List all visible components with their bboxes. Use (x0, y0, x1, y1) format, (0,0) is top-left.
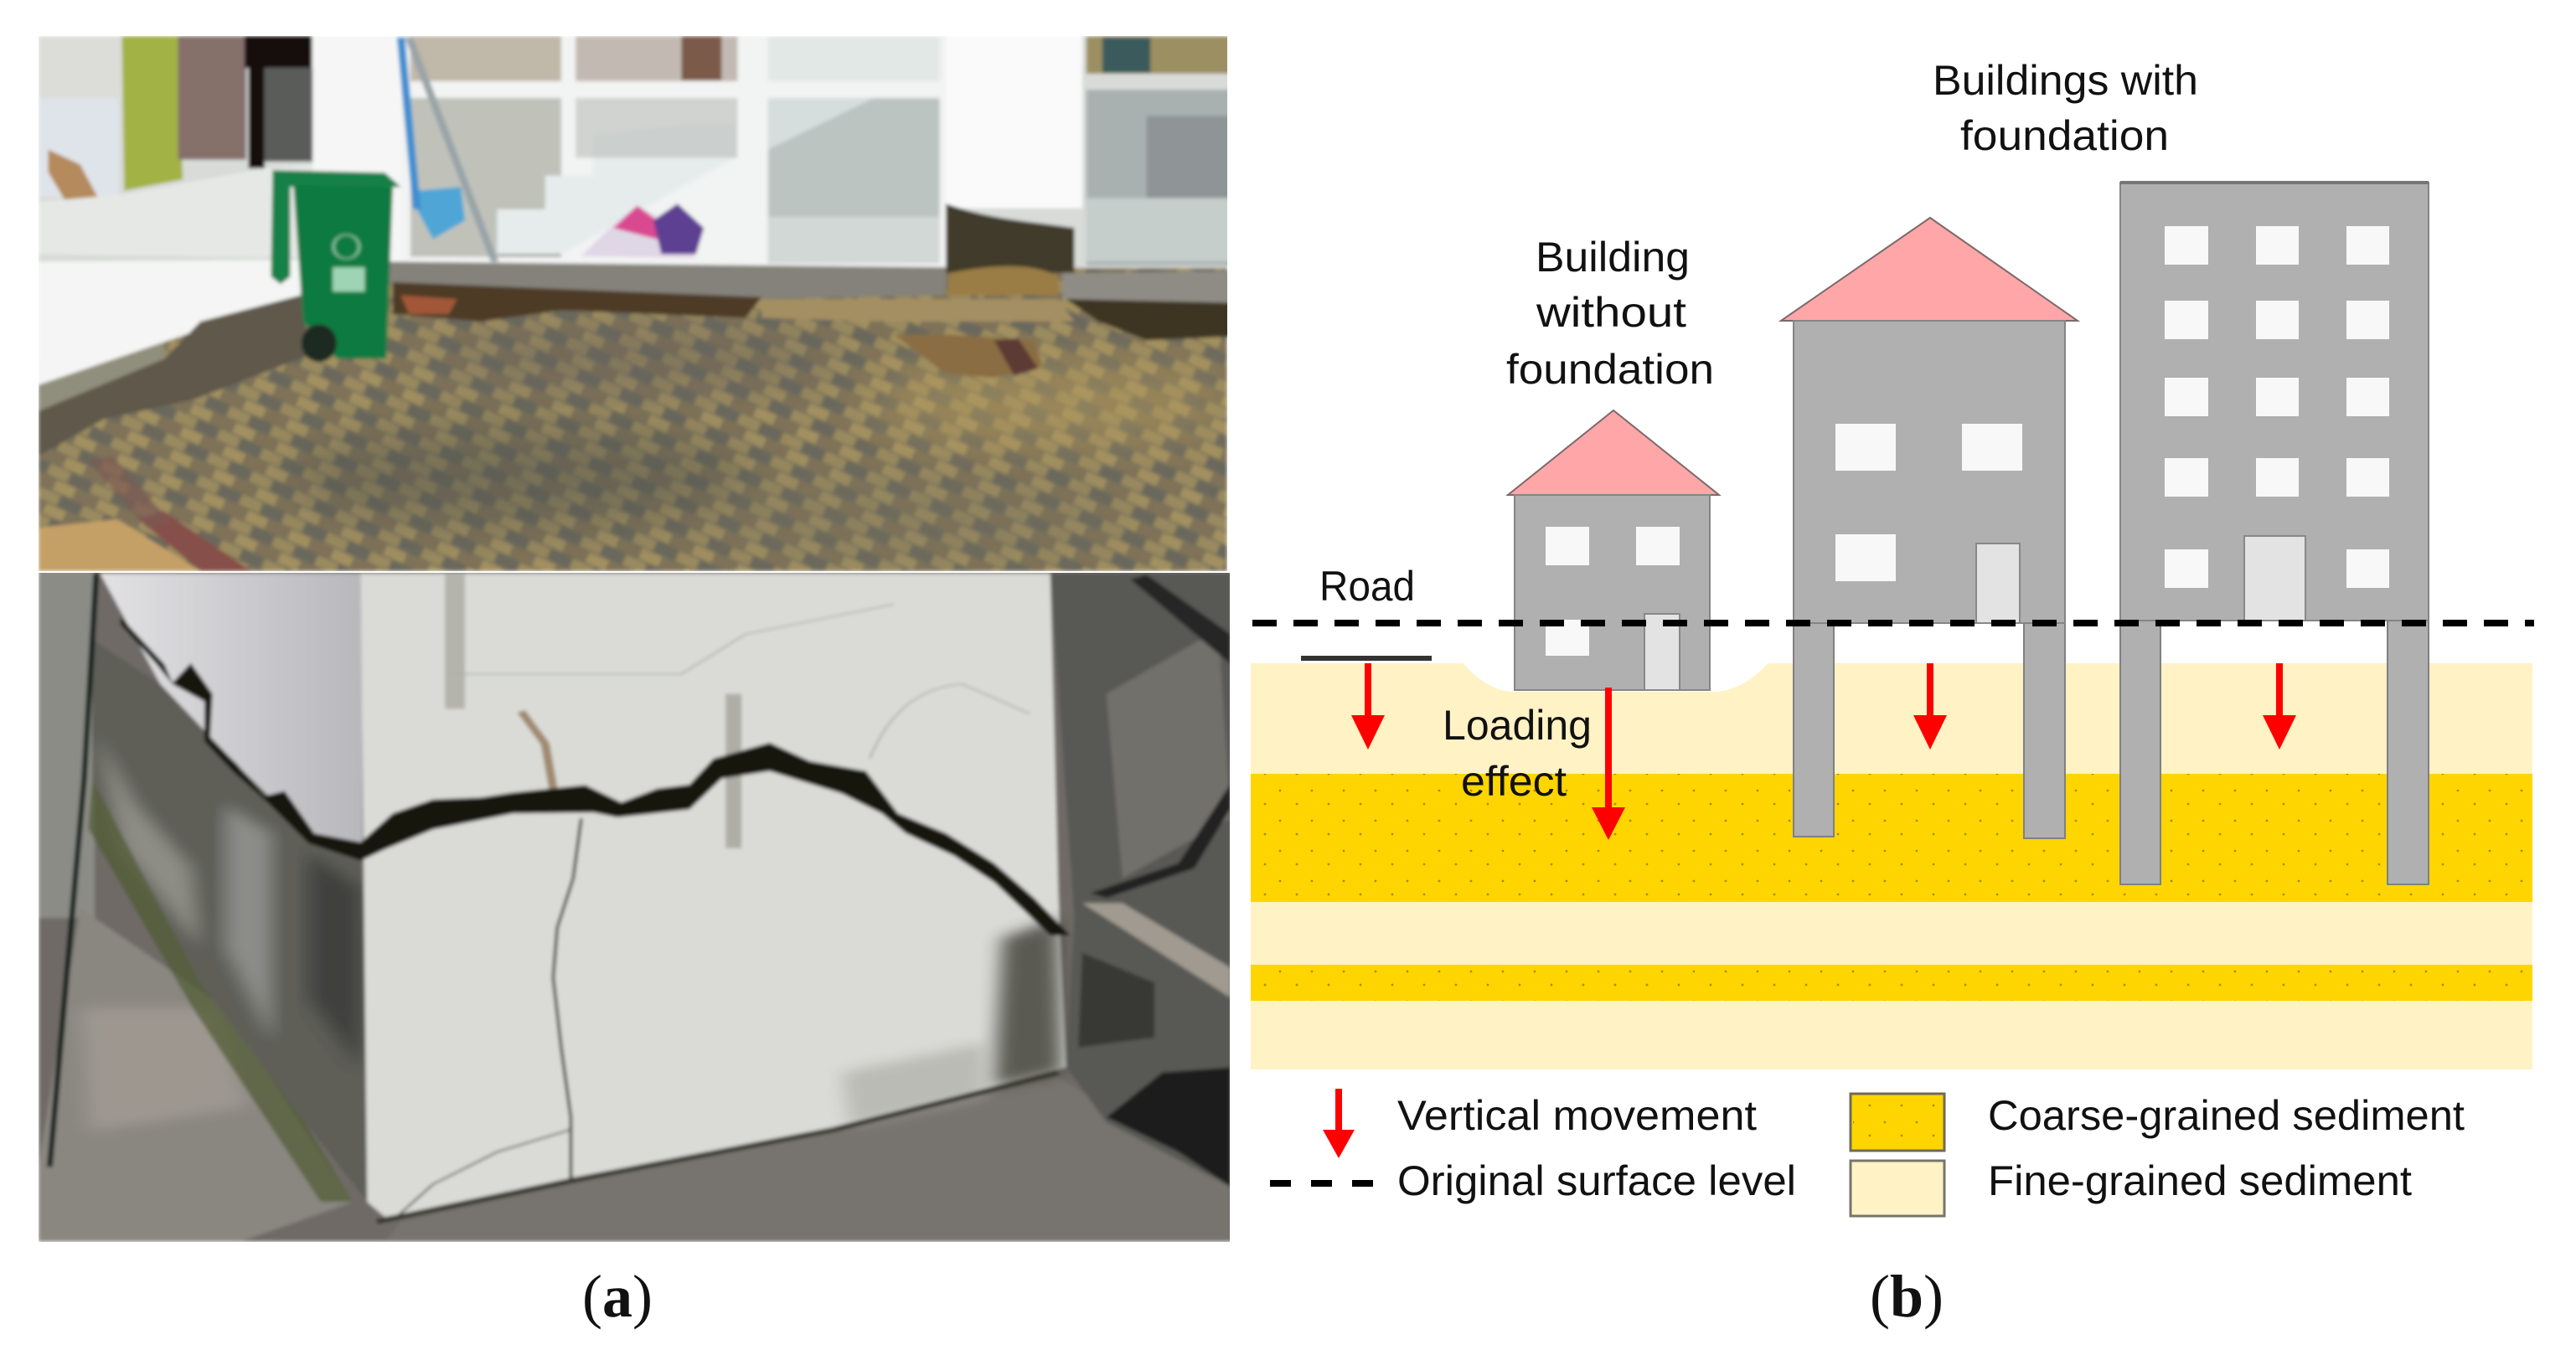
caption (b): (b) (1870, 1263, 1944, 1330)
door (1976, 544, 2020, 623)
coarse layer lower (1251, 965, 2532, 1001)
body (2120, 183, 2429, 621)
swatch: fine (1851, 1161, 1944, 1216)
legend label: coarse-grained: Coarse-grained sediment (1988, 1092, 2465, 1139)
settlement hollow (1462, 662, 1769, 692)
swatch: coarse (1851, 1094, 1944, 1151)
building and lobby (39, 36, 1233, 296)
label: loading effect (1443, 702, 1592, 805)
arrow: road settlement (1351, 663, 1385, 750)
arrow: low-rise settlement (1913, 663, 1947, 750)
icon: green wheelie bin (271, 170, 401, 362)
legend label: vertical movement: Vertical movement (1397, 1092, 1757, 1139)
label: building without foundation: Building (1536, 234, 1690, 281)
label: buildings with foundation (1933, 57, 2198, 159)
paved ground (39, 251, 1231, 571)
legend arrow (1323, 1089, 1355, 1158)
photo: cracked wall corner (39, 569, 1233, 1242)
label: buildings with foundation: Buildings with (1933, 57, 2198, 104)
label: building without foundation: without (1536, 289, 1686, 336)
building without foundation (1508, 410, 1719, 690)
photo: damaged pavement and building base (39, 36, 1233, 571)
legend dashes (1270, 1180, 1374, 1187)
body (1515, 495, 1710, 690)
diagram: sediment layers (1251, 662, 2532, 1069)
legend label: fine-grained: Fine-grained sediment (1988, 1157, 2412, 1204)
roof (1508, 410, 1719, 495)
legend label: original surface level: Original surface level (1397, 1157, 1796, 1204)
foundation ledge and collapsed edge (39, 260, 1231, 456)
piles (1794, 623, 2065, 838)
legend (1270, 1089, 2465, 1216)
roof edge (2120, 181, 2429, 184)
windows (1546, 527, 1680, 656)
door (1644, 614, 1680, 690)
piles (2120, 621, 2429, 884)
original surface dashed line (1252, 620, 2534, 626)
low-rise building with foundation (1781, 218, 2078, 838)
door (2244, 536, 2305, 621)
front wall face (361, 574, 1066, 1222)
arrow: high-rise settlement (2263, 663, 2296, 750)
main crack (121, 616, 1071, 935)
right stone wall (1051, 574, 1231, 1187)
label: Road: Road (1319, 563, 1415, 610)
coarse layer upper (1251, 774, 2532, 902)
caption (a): (a) (582, 1263, 653, 1330)
label: building without foundation (1506, 234, 1714, 393)
label: loading effect: effect (1461, 758, 1567, 805)
body (1794, 321, 2065, 623)
windows (1835, 424, 2022, 581)
label: loading effect: Loading (1443, 702, 1592, 749)
left wall faces (88, 574, 367, 1202)
windows (2165, 226, 2389, 588)
black pole (49, 574, 96, 1167)
label: buildings with foundation: foundation (1960, 112, 2169, 159)
ground and left strip (39, 569, 1233, 1242)
arrow: loading effect settlement (1592, 688, 1625, 840)
high-rise building with foundation (2120, 181, 2429, 884)
label: building without foundation: foundation (1506, 346, 1714, 393)
roof (1781, 218, 2078, 321)
road surface (1301, 656, 1432, 661)
